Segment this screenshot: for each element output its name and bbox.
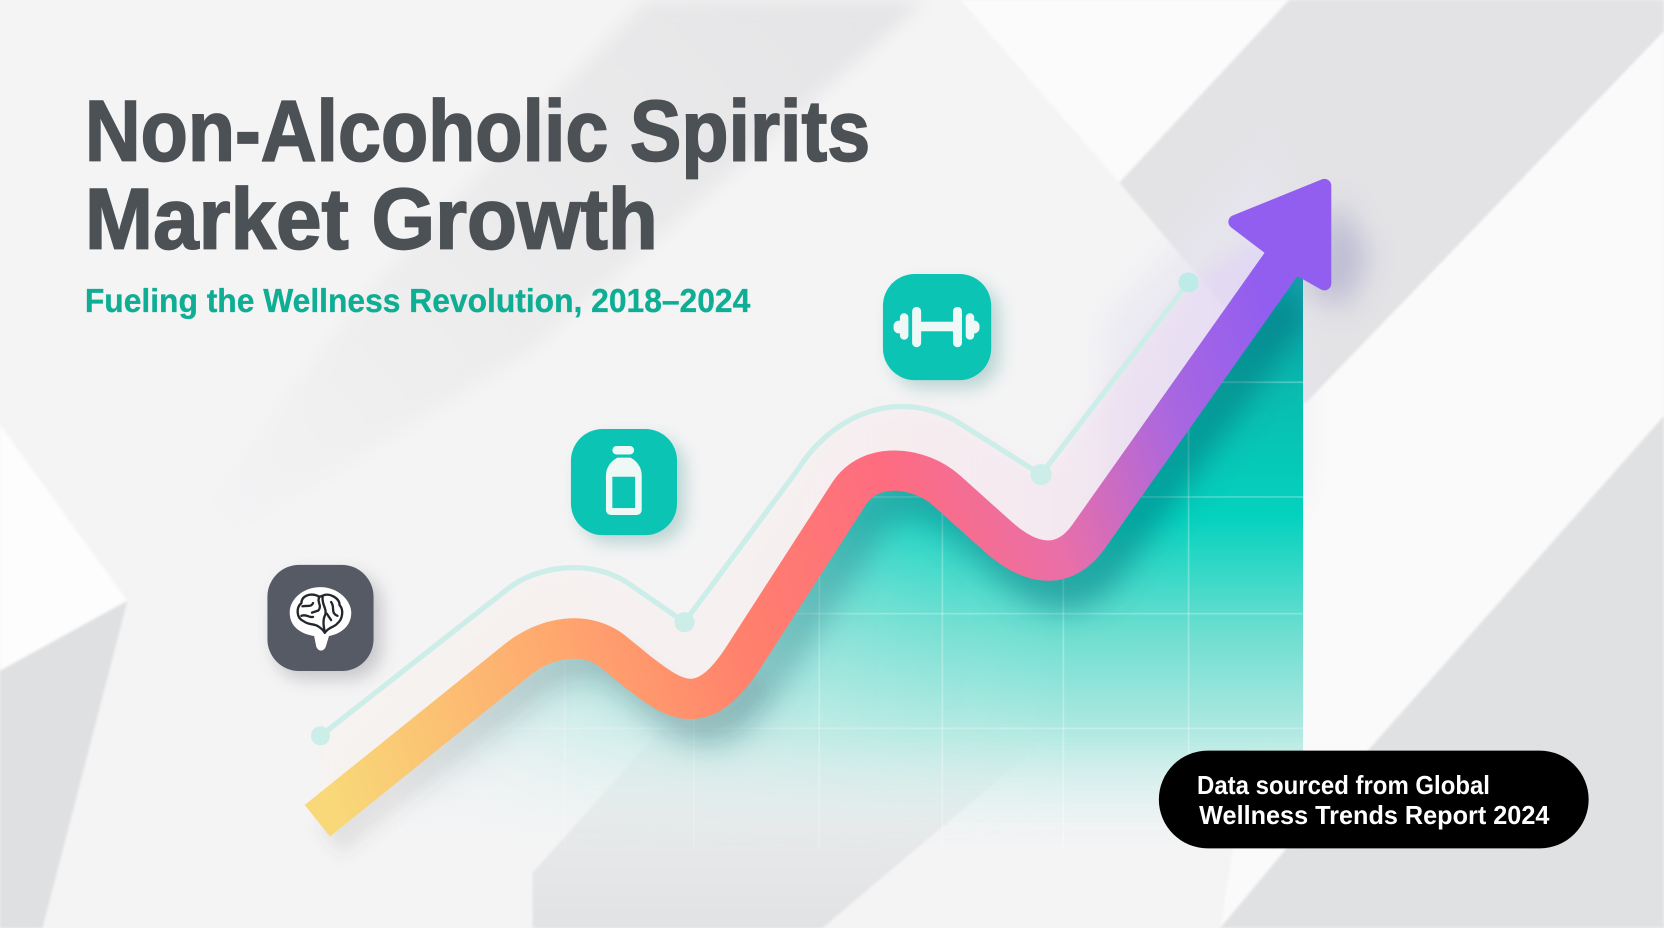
icon: brain [267, 565, 382, 680]
callout: data source: Data sourced from Global [1197, 772, 1490, 800]
callout: data source [1159, 751, 1589, 848]
arrow head shadow [1305, 202, 1369, 308]
area chart under the growth line [423, 276, 1304, 820]
subtitle: Fueling the Wellness Revolution, 2018–2024 [85, 282, 751, 319]
callout: data source: Wellness Trends Report 2024 [1199, 802, 1550, 830]
icon: dumbbell [883, 274, 1000, 389]
icon: bottle [571, 429, 686, 544]
growth arrow [317, 186, 1324, 821]
frosted band above the line [317, 212, 1300, 821]
ghost trend line with dots [311, 272, 1199, 745]
title [85, 83, 870, 267]
title: Non-Alcoholic Spirits [85, 83, 870, 179]
growth line soft shadow [330, 658, 756, 840]
title: Market Growth [85, 171, 658, 267]
